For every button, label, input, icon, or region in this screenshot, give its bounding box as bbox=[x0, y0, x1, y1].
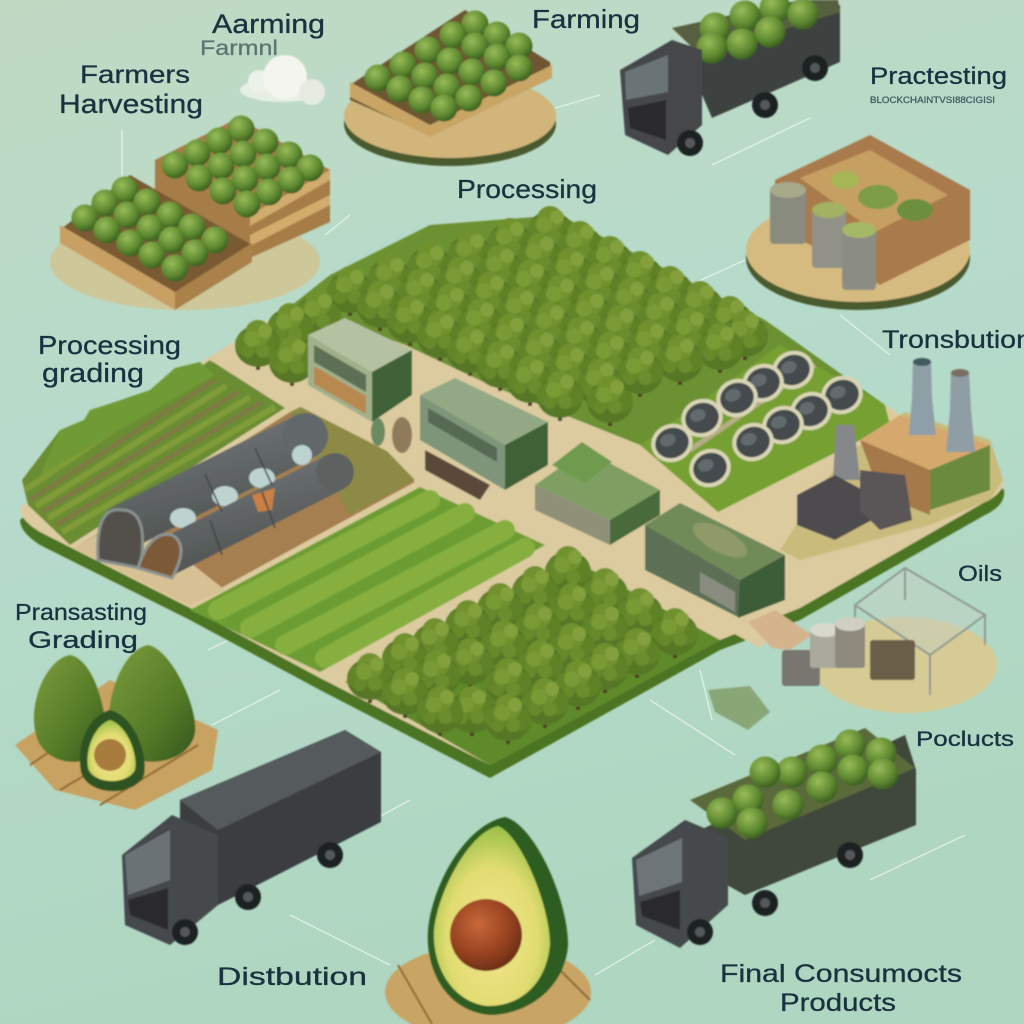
field: brown soil with tunnels bbox=[75, 392, 415, 605]
label: Practesting: Practesting bbox=[870, 63, 1007, 90]
label: Farming: Farming bbox=[532, 4, 640, 34]
orchard: small group bbox=[235, 290, 341, 386]
platform: farm map bbox=[20, 206, 1004, 778]
platform base bbox=[20, 215, 1004, 778]
machines bbox=[646, 345, 868, 493]
building 2 bbox=[420, 378, 548, 500]
connector lines bbox=[122, 95, 965, 975]
label: Farmnl: Farmnl bbox=[200, 37, 278, 60]
processing station bbox=[746, 135, 970, 310]
truck lower left bbox=[122, 730, 381, 945]
label: Distbution: Distbution bbox=[217, 963, 367, 991]
building 3 bbox=[535, 442, 660, 545]
grass behind orchards bbox=[235, 215, 890, 765]
leaf patch bbox=[708, 686, 770, 730]
top centre crate bbox=[344, 10, 556, 166]
crate stack front bbox=[60, 175, 252, 310]
truck lower right bbox=[632, 728, 916, 948]
label: Tronsbution: Tronsbution bbox=[882, 326, 1024, 354]
label: Processing top: Processing bbox=[457, 174, 597, 204]
oils station bbox=[782, 568, 997, 713]
road bbox=[205, 355, 790, 648]
field: green rows bbox=[190, 487, 545, 672]
road spur bbox=[748, 610, 812, 650]
label: Grading: Grading bbox=[28, 627, 138, 654]
wooden plate bbox=[385, 944, 591, 1024]
truck top bbox=[620, 0, 840, 156]
label: Aarming: Aarming bbox=[212, 9, 325, 39]
building 4 bbox=[645, 503, 785, 618]
label: Poclucts: Poclucts bbox=[916, 728, 1014, 751]
label: Processing left: Processing bbox=[38, 330, 181, 360]
tunnels bbox=[98, 413, 354, 578]
workers bbox=[371, 417, 412, 453]
label: Final Consumocts: Final Consumocts bbox=[720, 960, 962, 988]
central avocado bbox=[385, 817, 591, 1024]
barrels bbox=[770, 182, 876, 290]
top-left harvest crates bbox=[50, 116, 330, 310]
label: Harvesting: Harvesting bbox=[59, 89, 203, 119]
label: grading: grading bbox=[42, 358, 144, 388]
factory bbox=[780, 358, 1003, 560]
label: Pransasting: Pransasting bbox=[15, 599, 147, 625]
label: Oils: Oils bbox=[958, 561, 1002, 586]
orchard: upper bbox=[327, 206, 768, 426]
label: Farmers: Farmers bbox=[80, 61, 190, 89]
cloud bbox=[240, 55, 325, 105]
field: crop rows bbox=[22, 360, 285, 545]
avocado pair bbox=[15, 645, 218, 810]
orchard: lower bbox=[347, 546, 698, 744]
crate stack back bbox=[155, 116, 330, 258]
label: small caption: BLOCKCHAINTVSI88CIGISI bbox=[870, 95, 995, 105]
label: Products: Products bbox=[780, 989, 896, 1017]
building 1 bbox=[308, 318, 412, 422]
